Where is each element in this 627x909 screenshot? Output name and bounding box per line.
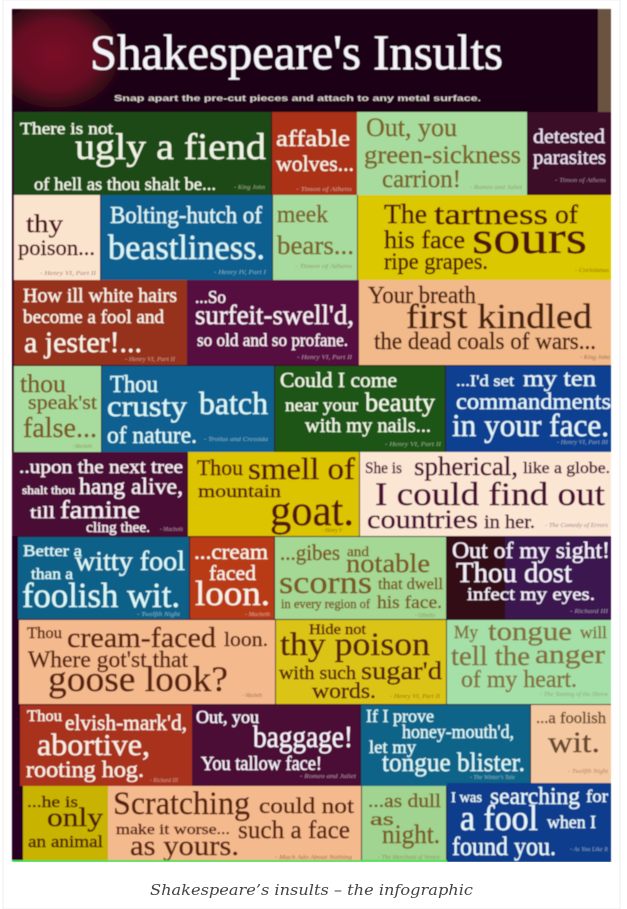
tile: baggage	[192, 705, 360, 786]
tile: only an animal: an animal	[28, 832, 103, 851]
tile: green-sickness carrion: Out, you	[366, 113, 457, 142]
tile: thy poison sugar'd words: Hide not	[309, 622, 367, 638]
tile: thy poison sugar'd words: thy poison	[280, 627, 430, 663]
tile: ugly a fiend	[14, 112, 271, 195]
tile: speak'st false: thou	[20, 371, 67, 398]
tile: dull as night: night.	[382, 820, 440, 849]
caption: Shakespeare’s insults – the infographic	[150, 881, 474, 899]
tile: elvish-mark'd abortive	[20, 705, 192, 786]
tile: hang alive	[12, 452, 187, 536]
tile: tongue will tell: of my heart.	[461, 667, 577, 693]
tile: white hairs jester: How ill white hairs	[23, 285, 177, 307]
tile: mountain goat: - Henry V	[322, 528, 343, 534]
tile: out of my sight: Thou dost	[456, 558, 572, 589]
tile: thy poison: thy	[26, 211, 64, 238]
tile: beauty with my nails: - Henry VI, Part II	[385, 442, 442, 448]
tile: detested parasites: detested	[533, 126, 605, 148]
tile: notable scorns: ...gibes	[280, 540, 340, 565]
tile: affable wolves: affable	[276, 126, 350, 151]
tile: affable wolves: - Timon of Athens	[296, 186, 353, 193]
tile: cream faced loon: - Macbeth	[245, 612, 270, 618]
tile: bolting-hutch of beastliness	[101, 195, 272, 280]
tile: speak'st false: false...	[23, 413, 97, 444]
tile: mountain goat: smell of	[248, 451, 356, 486]
tile: beauty with my nails	[275, 366, 445, 452]
tile: green-sickness carrion: green-sickness	[364, 142, 521, 169]
tile: dull as night: as	[370, 809, 394, 829]
tile: tartness sours: sours	[472, 212, 587, 263]
tile: tartness sours	[358, 195, 611, 280]
tile: hang alive: till	[30, 503, 55, 522]
tile: notable scorns: scorns	[279, 564, 372, 600]
tile: searching for a fool: searching	[490, 784, 580, 810]
tile: tartness sours: The	[384, 199, 427, 229]
tile: surfeit-swell'd	[187, 280, 359, 365]
tile: goose look	[19, 620, 275, 704]
tile: spherical like a globe: - The Comedy of Errors	[545, 522, 609, 529]
tile: only an animal	[23, 786, 108, 860]
tile: ten commandments: my ten	[523, 366, 597, 391]
tile: green-sickness carrion: - Romeo and Juliet	[470, 185, 522, 191]
tile: ten commandments: - Henry VI, Part III	[557, 440, 609, 446]
tile: elvish-mark'd abortive: elvish-mark'd,	[65, 710, 187, 735]
tile: speak'st false	[14, 366, 101, 452]
tile: goose look: - Macbeth	[243, 693, 262, 699]
tile: out of my sight: Out of my sight!	[452, 538, 610, 563]
tile: scratching such a face: could not	[259, 793, 354, 818]
tile: white hairs jester: a jester!...	[24, 326, 142, 359]
tile: baggage: - Romeo and Juliet	[300, 774, 356, 780]
tile: thy poison sugar'd words	[276, 620, 446, 704]
tile: detested parasites	[528, 112, 611, 195]
tile: tongue will tell: will	[580, 623, 607, 642]
tile: affable wolves	[272, 112, 357, 195]
tile: witty fool	[18, 537, 189, 619]
tile: witty fool: witty fool	[75, 546, 185, 576]
tile: foolish wit: wit.	[548, 726, 600, 759]
tile: tongue will tell: - The Taming of the Shrew	[540, 691, 608, 698]
tile: surfeit-swell'd: so old and so profane.	[197, 330, 348, 350]
tile: dull as night: - The Merchant of Venice	[378, 854, 440, 861]
tile: only an animal: only	[47, 803, 103, 832]
tile: tongue will tell: tell the	[451, 641, 530, 671]
tile: ten commandments: commandments	[456, 389, 611, 414]
tile: searching for a fool: a fool	[460, 798, 538, 838]
tile: crusty batch: batch	[199, 385, 268, 421]
tile: goose look: goose look?	[48, 659, 228, 699]
tile: witty fool: - Twelfth Night	[137, 611, 180, 618]
tile: witty fool: foolish wit.	[22, 576, 180, 615]
tile: cream faced loon: ...cream	[194, 539, 268, 564]
tile: goose look: Thou	[27, 625, 62, 642]
tile: mountain goat: mountain	[198, 481, 281, 501]
tile: hang alive: ..upon the next tree	[19, 457, 183, 478]
tile: crusty batch: Thou	[110, 372, 158, 398]
tile: detested parasites: - Timon of Athens	[555, 177, 607, 184]
tile: green-sickness carrion	[357, 112, 527, 195]
tile: spherical like a globe: I could find out	[375, 477, 605, 513]
tile: searching for a fool: found you.	[452, 832, 556, 861]
tile: ten commandments: ...I'd set	[456, 373, 515, 390]
tile: cream faced loon: faced	[209, 561, 257, 585]
tile: foolish wit: - Twelfth Night	[568, 768, 608, 775]
subtitle: Snap apart the pre-cut pieces and attach to any metal surface.	[114, 93, 481, 103]
tile: only an animal: ...he is	[27, 794, 78, 811]
tile: meek bears: bears...	[277, 231, 354, 260]
tile: spherical like a globe: spherical,	[414, 452, 518, 481]
tile: notable scorns: in every region of	[281, 596, 371, 611]
tile: tongue will tell: tongue	[488, 617, 572, 646]
tile: searching for a fool: for	[586, 786, 608, 806]
tile: first kindled: first kindled	[406, 297, 593, 336]
tile: out of my sight	[447, 537, 611, 619]
tile: tongue blister	[361, 705, 530, 786]
tile: tongue blister: - The Winter's Tale	[470, 775, 515, 781]
tile: hang alive: - Macbeth	[160, 527, 183, 533]
tile: scratching such a face: as yours.	[130, 831, 239, 862]
tile: crusty batch: of nature.	[107, 423, 197, 449]
tile: baggage: You tallow face!	[201, 753, 322, 775]
tile: searching for a fool	[447, 783, 611, 862]
tile: bolting-hutch of beastliness: Bolting-hutch of	[110, 203, 262, 229]
tile: hang alive: shalt thou	[22, 483, 75, 497]
tile: green-sickness carrion: carrion!	[382, 166, 461, 193]
tile: baggage: baggage!	[253, 719, 353, 754]
tile: dull as night	[362, 786, 446, 861]
tile: beauty with my nails: beauty	[365, 388, 435, 417]
tile: first kindled: - King John	[580, 355, 610, 361]
tile: foolish wit: ...a foolish	[536, 710, 606, 727]
tile: searching for a fool: I was	[451, 790, 482, 806]
tile: elvish-mark'd abortive: - Richard III	[150, 778, 179, 784]
tile: ten commandments	[446, 366, 611, 452]
tile: tongue blister: let my	[369, 737, 416, 757]
tile: tongue blister: honey-mouth'd,	[402, 722, 514, 743]
tile: meek bears	[273, 195, 357, 280]
tile: witty fool: Better a	[23, 543, 82, 560]
tile: tongue will tell	[447, 617, 611, 704]
tile: surfeit-swell'd: ...So	[195, 287, 226, 307]
tile: detested parasites: parasites	[533, 147, 606, 169]
tile: goose look: cream-faced	[67, 623, 216, 654]
tile: spherical like a globe: She is	[365, 460, 402, 477]
tile: thy poison: poison...	[18, 235, 95, 260]
tile: dull as night: ...as dull	[368, 791, 441, 812]
tile: cream faced loon: loon.	[195, 574, 270, 613]
tile: beauty with my nails: Could I come	[280, 368, 397, 392]
tile: meek bears: meek	[277, 202, 328, 228]
title: Shakespeare's Insults	[90, 24, 503, 80]
tile: tongue will tell: anger	[535, 640, 605, 669]
tile: ten commandments: in your face.	[452, 407, 609, 443]
tile: hang alive: cling thee.	[86, 520, 150, 536]
tile: elvish-mark'd abortive: abortive,	[37, 727, 150, 762]
tile: scratching such a face: - Much Ado About Nothing	[275, 855, 352, 861]
tile: mountain goat: goat.	[270, 488, 354, 535]
tile: witty fool: than a	[31, 566, 73, 583]
tile: affable wolves: wolves...	[276, 151, 354, 176]
tile: spherical like a globe: like a globe.	[523, 460, 610, 477]
tile: mountain goat	[188, 451, 359, 536]
tile: white hairs jester	[14, 280, 187, 365]
tile: notable scorns	[275, 537, 446, 619]
tile: ugly a fiend: - King John	[234, 185, 265, 191]
tile: tartness sours: - Coriolanus	[575, 268, 610, 274]
tile: cream faced loon	[190, 537, 274, 619]
tile: first kindled: Your breath	[368, 283, 476, 309]
tile: bolting-hutch of beastliness: beastliness.	[108, 228, 265, 267]
tile: first kindled: the dead coals of wars...	[374, 329, 596, 355]
tile: notable scorns: - Othello	[415, 613, 435, 619]
tile: white hairs jester: become a fool and	[23, 307, 164, 328]
tile: ugly a fiend: There is not	[20, 119, 113, 138]
tile: tongue blister: tongue blister.	[382, 748, 525, 777]
tile: white hairs jester: - Henry VI, Part II	[125, 357, 176, 363]
tile: crusty batch: - Troilus and Cressida	[204, 437, 268, 443]
tile: out of my sight: - Richard III	[570, 609, 609, 615]
tile: tartness sours: of	[555, 200, 578, 229]
tile: notable scorns: and	[347, 545, 369, 560]
tile: scratching such a face: make it worse...	[116, 822, 230, 838]
tile: tartness sours: his face	[384, 227, 465, 254]
tile: ugly a fiend: of hell as thou shalt be...	[34, 174, 216, 194]
tile: hang alive: famine	[60, 497, 140, 524]
tile: mountain goat: Thou	[197, 455, 243, 480]
tile: surfeit-swell'd: - Henry VI, Part II	[297, 355, 353, 361]
tile: notable scorns: notable	[346, 549, 430, 578]
tile: speak'st false: speak'st	[28, 392, 97, 414]
tile: goose look: Where got'st that	[28, 647, 189, 672]
tile: ugly a fiend: ugly a fiend	[75, 127, 267, 168]
tile: searching for a fool: when I	[547, 812, 596, 832]
tile: meek bears: - Timon of Athens	[295, 263, 353, 270]
tile: tartness sours: tartness	[434, 198, 548, 231]
tile: thy poison sugar'd words: words.	[312, 678, 376, 703]
panel: title banner	[0, 0, 611, 113]
tile: foolish wit	[531, 705, 611, 786]
tile: spherical like a globe: in her.	[484, 512, 535, 533]
tile: searching for a fool: - As You Like It	[570, 847, 608, 853]
tile: beauty with my nails: near your	[285, 395, 358, 415]
tile: speak'st false: - Macbeth	[72, 444, 92, 450]
tile: thy poison sugar'd words: - Henry VI, Part II	[390, 694, 441, 700]
tile: goose look: loon.	[224, 629, 268, 651]
tile: thy poison sugar'd words: with such	[279, 663, 357, 684]
tile: notable scorns: his face.	[377, 592, 442, 612]
tile: elvish-mark'd abortive: rooting hog.	[26, 757, 144, 782]
tile: scratching such a face: such a face	[238, 817, 350, 844]
tile: crusty batch	[102, 366, 274, 452]
tile: thy poison	[14, 195, 100, 280]
tile: thy poison: - Henry VI, Part II	[40, 271, 97, 277]
tile: first kindled	[359, 280, 611, 365]
tile: out of my sight: infect my eyes.	[467, 584, 595, 604]
tile: scratching such a face: Scratching	[113, 786, 250, 822]
tile: notable scorns: that dwell	[378, 576, 444, 593]
tile: beauty with my nails: with my nails...	[305, 415, 431, 437]
tile: tartness sours: ripe grapes.	[384, 249, 488, 274]
tile: tongue blister: If I prove	[366, 706, 434, 726]
tile: elvish-mark'd abortive: Thou	[27, 708, 62, 725]
tile: spherical like a globe	[360, 452, 611, 536]
tile: thy poison sugar'd words: sugar'd	[361, 658, 443, 685]
tile: tongue will tell: My	[454, 622, 478, 642]
tile: scratching such a face	[108, 786, 361, 862]
tile: hang alive: hang alive,	[79, 474, 183, 499]
tile: crusty batch: crusty	[107, 390, 187, 423]
tile: spherical like a globe: countries	[367, 505, 478, 534]
tile: surfeit-swell'd: surfeit-swell'd,	[195, 300, 354, 330]
tile: baggage: Out, you	[196, 707, 259, 727]
tile: bolting-hutch of beastliness: - Henry IV, Part I	[214, 270, 267, 276]
